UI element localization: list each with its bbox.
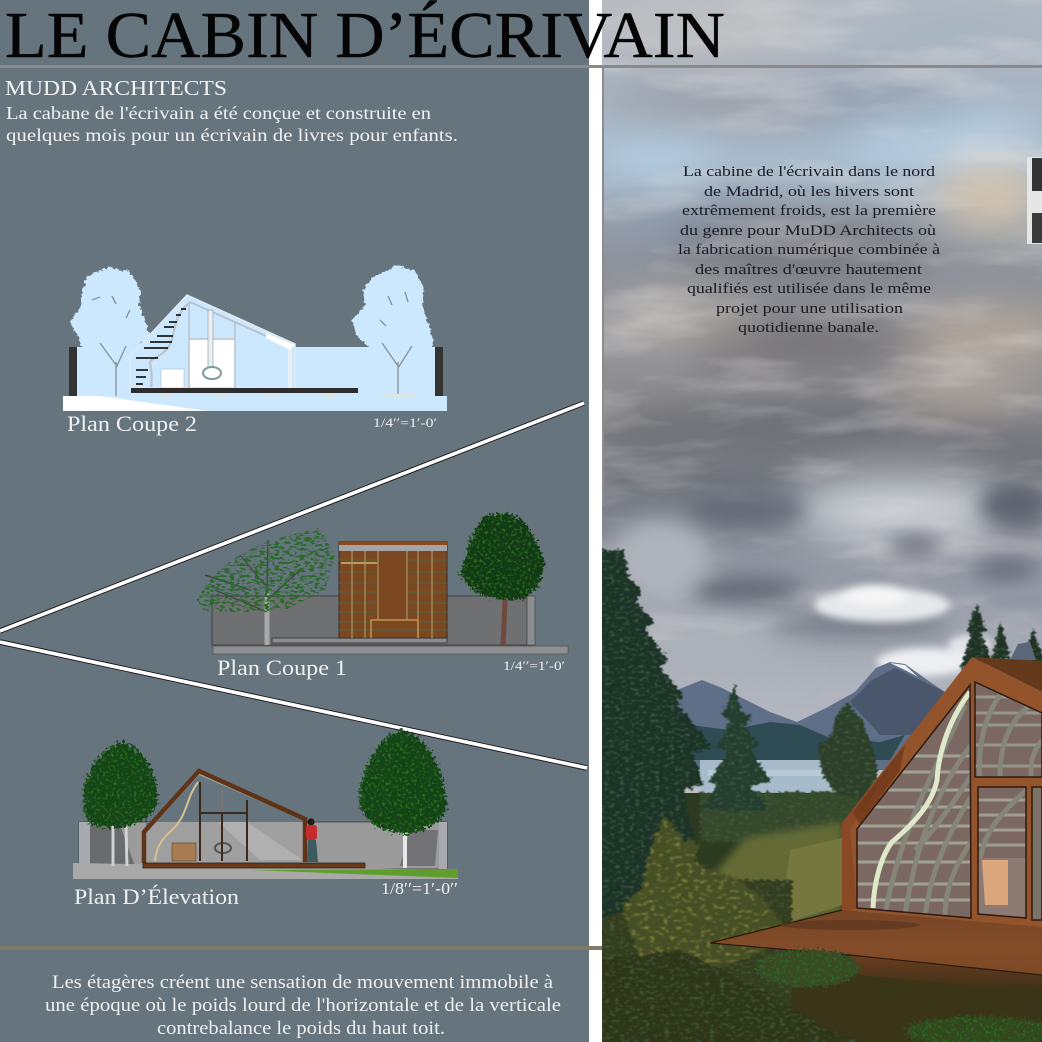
scale: Plan Coupe 1: 1/4′′=1′-0′ <box>503 658 565 673</box>
elevation drawing <box>73 730 458 879</box>
cabin elevation <box>143 771 365 868</box>
wall posts <box>69 347 443 396</box>
bottom text: une époque où le poids lourd de l'horizontale et de la verticale <box>45 996 561 1016</box>
ground and undergrowth <box>602 880 1042 1042</box>
deck slab <box>131 388 358 393</box>
cabin section <box>130 295 295 388</box>
spruces behind the roof <box>960 605 1042 668</box>
ground <box>213 646 568 654</box>
description on sky: projet pour une utilisation <box>716 301 904 317</box>
roof eave shadow <box>853 745 905 825</box>
deck <box>710 910 1042 975</box>
left tree <box>197 528 335 645</box>
scale: Plan Coupe 2: 1/4′′=1′-0′ <box>373 415 437 430</box>
front bushes <box>756 949 1042 1042</box>
roof back <box>972 657 1042 692</box>
description on sky: du genre pour MuDD Architects où <box>680 223 937 239</box>
door pane frame <box>978 787 1026 918</box>
section drawing: Plan Coupe 2 <box>63 265 447 411</box>
wall post <box>527 596 535 645</box>
facade <box>339 542 447 638</box>
left tree <box>83 742 157 866</box>
spruce: second tree <box>700 683 772 810</box>
intro text: La cabane de l'écrivain a été conçue et construite en <box>6 103 431 123</box>
cut-off scale bar <box>1027 157 1042 244</box>
meadow and forest floor <box>602 789 862 947</box>
right tree <box>359 730 446 868</box>
glass: door pane <box>978 788 1026 918</box>
label: Plan Coupe 2: Plan Coupe 2 <box>67 411 197 436</box>
cloudy sky <box>590 0 1042 800</box>
diagonal line lower <box>0 642 587 768</box>
distant peak behind roof <box>1010 642 1036 660</box>
right door sliver <box>1032 787 1042 920</box>
intro text: quelques mois pour un écrivain de livres pour enfants. <box>6 125 458 145</box>
tree silhouette left <box>70 267 150 396</box>
description on sky: la fabrication numérique combinée à <box>678 242 940 258</box>
bottom text: contrebalance le poids du haut toit. <box>157 1019 445 1039</box>
foreground brush <box>636 949 856 1042</box>
section drawing: Plan Coupe 1 <box>197 513 568 654</box>
rear wall <box>79 822 447 869</box>
description on sky: extrêmement froids, est la première <box>682 203 936 219</box>
description on sky: La cabine de l'écrivain dans le nord <box>683 164 936 180</box>
spruce: large left tree <box>590 550 713 925</box>
wood frame <box>842 657 1042 927</box>
label: Plan Coupe 1: Plan Coupe 1 <box>217 655 347 680</box>
description on sky: des maîtres d'œuvre hautement <box>695 262 923 278</box>
diagonal line upper <box>0 403 584 631</box>
person <box>306 818 318 862</box>
title: LE CABIN D’ÉCRIVAIN <box>5 0 725 72</box>
description on sky: quotidienne banale. <box>738 320 879 336</box>
description on sky: de Madrid, où les hivers sont <box>704 184 915 200</box>
vertical edge line <box>602 66 604 506</box>
bottom text: Les étagères créent une sensation de mouvement immobile à <box>52 973 553 993</box>
glass: upper pane <box>975 680 1042 780</box>
scale: elevation: 1/8′′=1′-0′′ <box>381 879 458 898</box>
deck <box>272 638 447 643</box>
heading: firm: MUDD ARCHITECTS <box>5 76 227 100</box>
cloud texture <box>602 0 1042 640</box>
top rule <box>0 65 1042 68</box>
ground <box>73 863 458 879</box>
garden wall <box>77 347 435 396</box>
right tree <box>460 513 544 645</box>
panel: landscape photo <box>590 0 1042 1042</box>
under-deck shadow <box>850 956 1042 986</box>
tree silhouette right <box>352 265 433 396</box>
description on sky: qualifiés est utilisée dans le même <box>687 281 931 297</box>
panel: drawings <box>0 0 589 1042</box>
spruce: tree by cabin <box>818 703 878 800</box>
mountains and lake <box>672 662 960 796</box>
glass: left pane <box>858 688 970 918</box>
cabin <box>842 657 1042 927</box>
grey wall <box>212 596 527 645</box>
bottom rule <box>0 946 602 950</box>
label: Plan D'Élevation: Plan D’Élevation <box>74 884 239 909</box>
yellow-green young fir <box>620 815 787 975</box>
site ground <box>63 394 447 411</box>
